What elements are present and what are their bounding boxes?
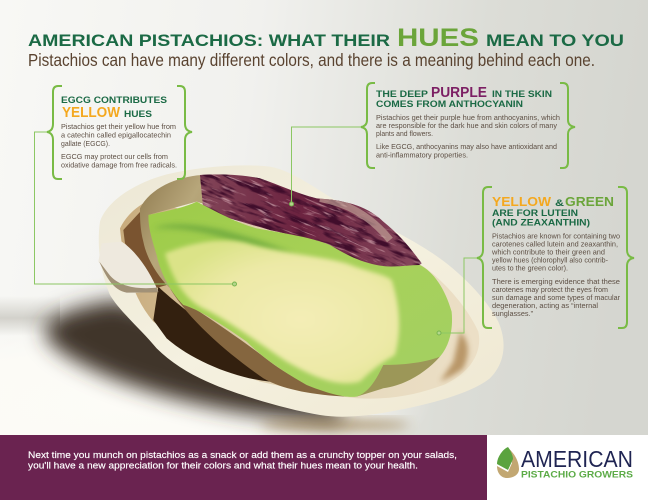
- body text: purple: Pistachios get their purple hue from anthocyanins, which: [376, 113, 560, 122]
- body text: EGCG: gallate (EGCG).: [61, 139, 110, 148]
- heading: deep purple: PURPLE: [431, 85, 487, 101]
- heading: deep purple: THE DEEP: [376, 89, 429, 100]
- body text: lutein: [491, 231, 620, 318]
- skin lower right: [357, 357, 440, 397]
- logo panel: [487, 435, 648, 500]
- purple skin: [200, 174, 422, 266]
- brown skin under kernel: [170, 288, 347, 397]
- kernel: [148, 202, 452, 397]
- heading: yellow and green: ARE FOR LUTEIN: [492, 208, 578, 219]
- inner membrane: [98, 242, 158, 293]
- heading: yellow and green: &: [555, 198, 564, 209]
- body text: lutein: sun damage and some types of macular: [492, 293, 620, 302]
- logo wordmark: AMERICAN: [521, 446, 633, 472]
- body text: purple: Like EGCG, anthocyanins may also have antioxidant and: [376, 142, 557, 151]
- heading: yellow and green: YELLOW: [492, 195, 551, 209]
- body text: lutein: which contribute to their green and: [491, 247, 605, 256]
- pistachio photo: [98, 166, 504, 417]
- footer message: you'll have a new appreciation for their colors and what their hues mean to your health.: [28, 460, 418, 470]
- heading: deep purple: COMES FROM ANTHOCYANIN: [376, 99, 523, 110]
- bracket and leader: EGCG: [34, 86, 236, 286]
- heading: EGCG contributes yellow hues: HUES: [124, 109, 152, 120]
- pale kernel flesh: [165, 241, 399, 383]
- kernel green: [148, 202, 452, 397]
- body text: lutein: yellow hues (chlorophyll also contrib-: [492, 255, 608, 264]
- body text: purple: [376, 113, 560, 160]
- title: AMERICAN PISTACHIOS: WHAT THEIR: [28, 31, 390, 50]
- body text: lutein: Pistachios are known for containing two: [492, 231, 620, 240]
- title: HUES: [397, 24, 479, 52]
- body text: lutein: carotenes may protect the eyes from: [492, 285, 608, 294]
- body text: purple: are responsible for the dark hue and skin colors of many: [376, 121, 557, 130]
- body text: purple: anti-inflammatory properties.: [376, 150, 468, 160]
- footer banner: [0, 435, 487, 500]
- heading: yellow and green: GREEN: [565, 195, 614, 209]
- heading: EGCG contributes yellow hues: EGCG CONTRIBUTES: [61, 95, 167, 106]
- body text: EGCG: Pistachios get their yellow hue from: [61, 122, 176, 131]
- bracket and leader: purple: [290, 83, 575, 206]
- heading: EGCG contributes yellow hues: YELLOW: [62, 105, 120, 121]
- brown skin left: [140, 175, 205, 288]
- logo wordmark: PISTACHIO GROWERS: [521, 470, 633, 480]
- footer message: [28, 450, 457, 470]
- bracket and leader: lutein: [437, 187, 634, 335]
- body text: EGCG: oxidative damage from free radicals.: [61, 160, 177, 170]
- title: MEAN TO YOU: [486, 31, 624, 50]
- body text: lutein: sunglasses.”: [492, 309, 533, 318]
- tan stain right: [440, 332, 468, 382]
- heading: yellow and green: [492, 195, 614, 228]
- body text: EGCG: [61, 122, 177, 170]
- footer message: Next time you munch on pistachios as a snack or add them as a crunchy topper on your salads,: [28, 450, 457, 460]
- heading: deep purple: IN THE SKIN: [492, 89, 552, 100]
- icon: pistachio logo: [497, 447, 519, 478]
- callout: EGCG yellow hues: [34, 86, 236, 286]
- body text: lutein: carotenes called lutein and zeaxanthin,: [492, 239, 618, 248]
- heading: deep purple: [376, 85, 552, 110]
- shell: [99, 165, 504, 417]
- body text: lutein: There is emerging evidence that these: [492, 277, 620, 286]
- dark cavity: [153, 287, 270, 382]
- body text: EGCG: EGCG may protect our cells from: [61, 152, 168, 161]
- shell interior: [120, 202, 479, 399]
- body text: lutein: degeneration, acting as “internal: [492, 301, 598, 310]
- dark crease: [153, 224, 293, 254]
- body text: EGCG: a catechin called epigallocatechin: [61, 130, 171, 140]
- heading: yellow and green: (AND ZEAXANTHIN): [492, 218, 590, 228]
- callout: deep purple: [290, 83, 575, 206]
- drop shadow of shell: [0, 296, 440, 435]
- body text: lutein: utes to the green color).: [492, 263, 568, 272]
- heading: EGCG contributes yellow hues: [61, 95, 167, 121]
- body text: purple: plants and flowers.: [376, 129, 433, 138]
- callout: yellow and green: [437, 187, 634, 335]
- title: [28, 24, 624, 52]
